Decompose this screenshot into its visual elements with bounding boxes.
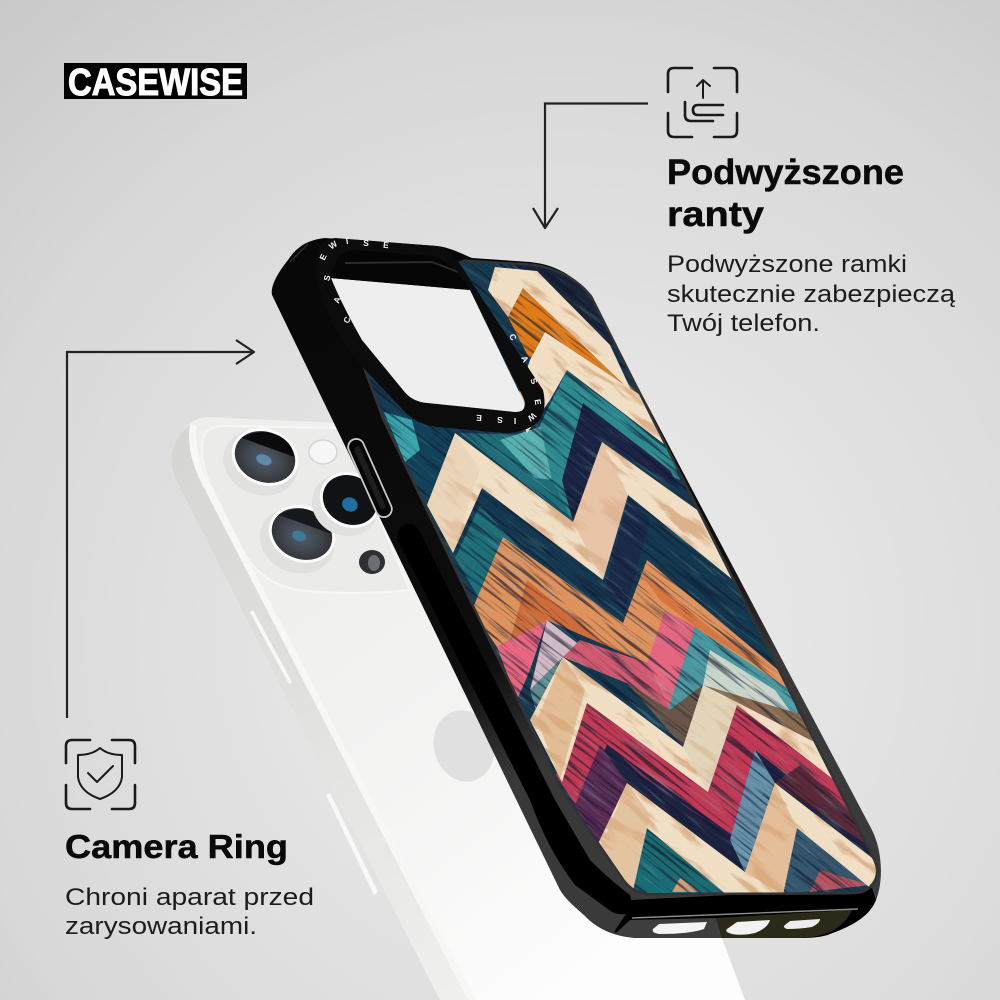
camera plateau — [202, 426, 410, 593]
bottom wall highlight — [632, 909, 858, 918]
ring inner lip — [330, 250, 470, 290]
sensor — [359, 550, 385, 574]
heading: raised edges — [667, 153, 904, 234]
white phone — [172, 416, 745, 1000]
ring lettering: A — [519, 354, 531, 364]
text: raised edges description: skutecznie zabezpieczą — [667, 281, 956, 308]
ring lettering: I — [514, 416, 516, 426]
ring lettering: E — [317, 252, 329, 262]
arrow to raised edges — [533, 104, 648, 228]
arrow to camera ring — [67, 340, 254, 718]
flash — [309, 440, 337, 464]
dark scratches — [594, 580, 608, 594]
chevron pattern artwork — [366, 262, 876, 893]
case bottom wall — [614, 888, 876, 938]
bottom wall right translucent — [716, 910, 852, 938]
ring lettering: S — [496, 415, 503, 425]
ring opening backdrop — [331, 278, 524, 412]
icon: shield — [66, 740, 135, 809]
ring lettering: W — [525, 411, 538, 424]
pale scratches — [594, 580, 608, 594]
apple logo shadow — [426, 703, 502, 789]
text: raised edges description: Twój telefon. — [667, 310, 820, 337]
ring lettering: E — [533, 398, 543, 406]
ring lip gloss — [345, 262, 458, 272]
side button upper — [250, 610, 292, 684]
ring lettering: A — [331, 295, 343, 305]
ring lettering: S — [528, 376, 540, 386]
lens bottom — [250, 493, 346, 585]
ring lettering: E — [475, 413, 482, 423]
bottom wall left translucent — [616, 918, 722, 938]
logo: CASEWISE — [68, 62, 243, 104]
side button lower — [326, 793, 378, 895]
lens top — [213, 416, 309, 507]
phone side band — [172, 424, 468, 1000]
ring lettering: E — [383, 240, 390, 250]
phone side highlight — [189, 424, 476, 1000]
ring lettering: S — [363, 238, 370, 248]
text: camera ring description: Chroni aparat przed — [65, 884, 314, 911]
colour patches — [380, 262, 880, 895]
text: raised edges description: Podwyższone ramki — [667, 251, 907, 278]
text: raised edges description — [667, 251, 956, 337]
lens right — [301, 459, 391, 548]
heading: raised edges: Podwyższone — [667, 153, 904, 192]
cream mottling — [427, 433, 797, 895]
case upper gloss line — [290, 244, 308, 262]
ring lettering: I — [345, 236, 349, 246]
text: camera ring description: zarysowaniami. — [65, 913, 257, 940]
ring lettering: S — [321, 274, 333, 282]
case side dark slot — [398, 524, 631, 914]
icon: raised edges — [668, 68, 737, 137]
cream chevrons — [427, 267, 885, 900]
ring lettering: C — [341, 315, 353, 325]
phone body — [172, 417, 745, 1000]
side power button — [346, 436, 394, 520]
port left — [653, 922, 707, 934]
base navy — [366, 262, 868, 893]
ring lettering: C — [507, 332, 519, 342]
camera ring — [317, 236, 545, 433]
ring lettering: W — [327, 238, 340, 251]
text: camera ring description — [65, 884, 314, 940]
heading: raised edges: ranty — [667, 195, 765, 234]
heading: camera ring: Camera Ring — [65, 828, 288, 865]
ring frame — [317, 238, 545, 433]
black case — [272, 238, 881, 938]
case body — [272, 238, 881, 938]
art bezel — [340, 262, 876, 893]
ring lettering — [317, 236, 543, 426]
port right — [784, 919, 820, 929]
port middle — [726, 920, 770, 935]
